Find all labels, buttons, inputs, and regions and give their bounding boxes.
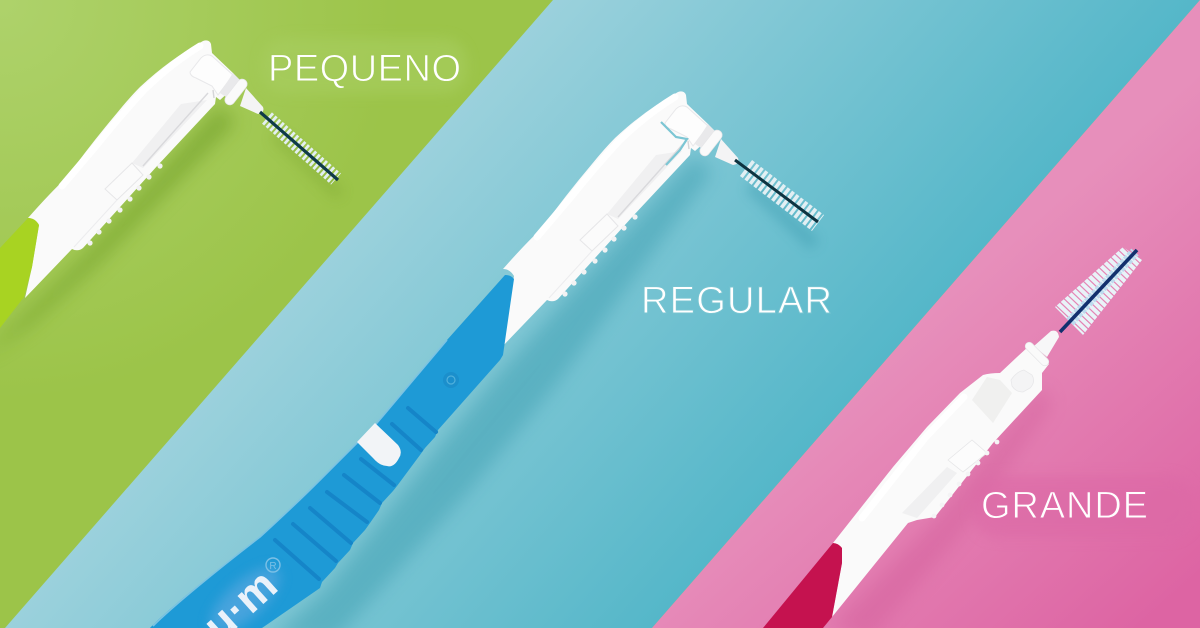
icon: grande crimson grip <box>763 543 842 628</box>
logo: GUM on handle: R <box>269 561 277 572</box>
label: PEQUENO: PEQUENO <box>268 48 461 90</box>
brush: regular <box>150 91 818 628</box>
label: GRANDE: GRANDE <box>981 485 1148 527</box>
icon: pequeno handle <box>0 40 263 328</box>
icon: regular blue grip <box>150 275 514 628</box>
icon: regular white handle <box>500 91 738 349</box>
panel: pink background <box>652 0 1200 628</box>
icon: grande white handle <box>832 331 1059 617</box>
icon: pequeno bristles <box>260 112 338 180</box>
panel: green background <box>0 0 553 628</box>
brush: pequeno <box>0 40 340 360</box>
brush: grande <box>763 241 1146 628</box>
icon: grande bristles <box>1055 248 1142 335</box>
icon: regular bristles <box>735 160 818 223</box>
label: GRANDE <box>972 476 1194 538</box>
label: REGULAR: REGULAR <box>641 280 832 322</box>
